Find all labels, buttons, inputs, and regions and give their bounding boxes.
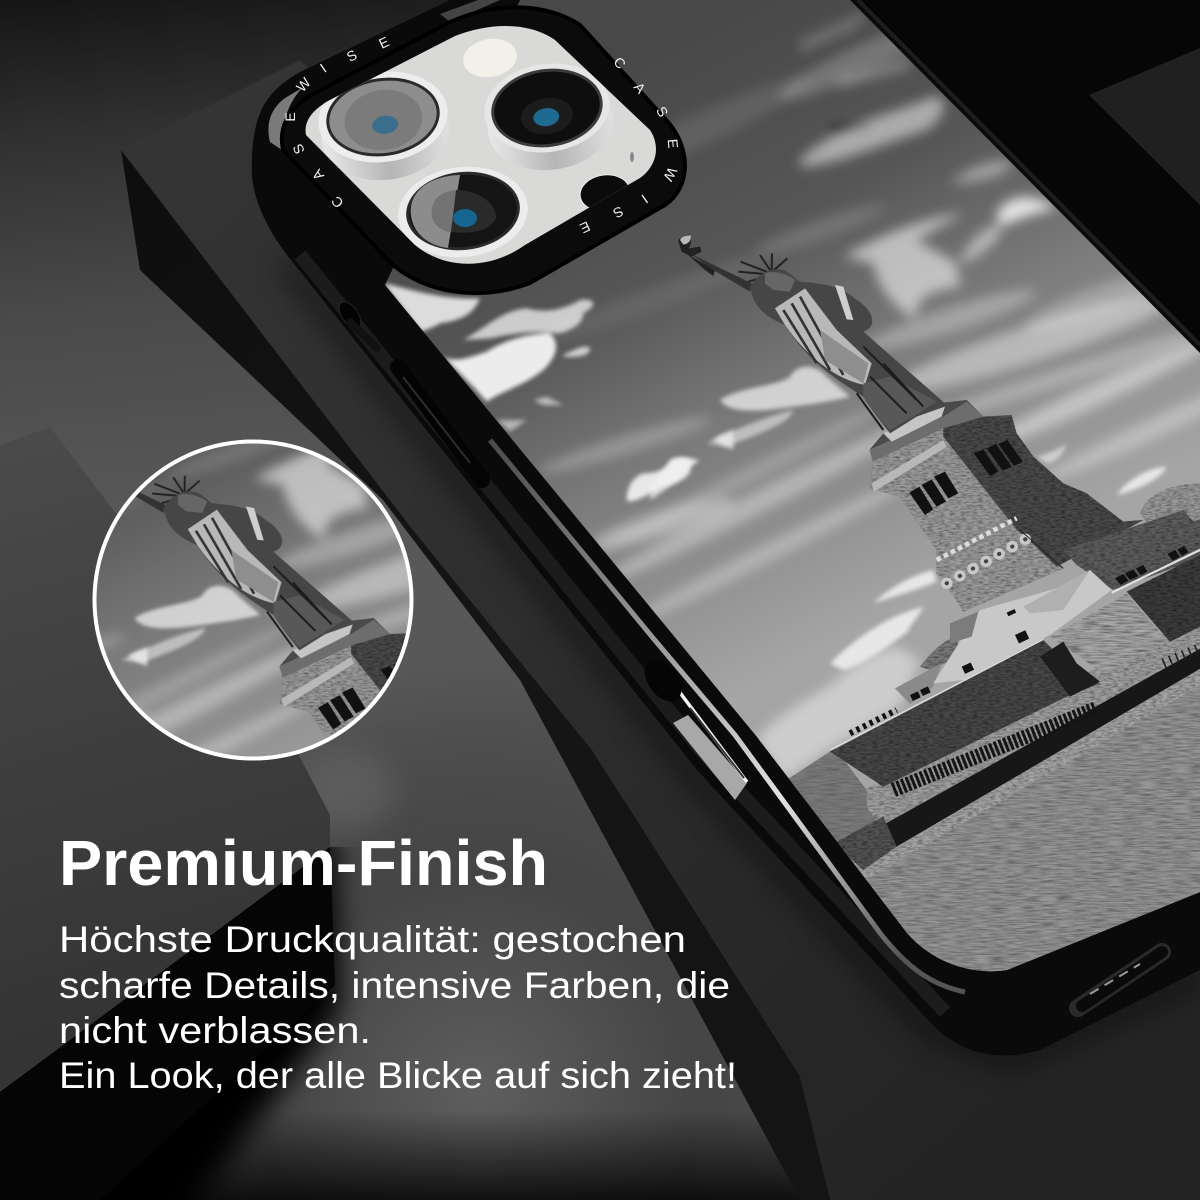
brand text left arc: E <box>376 33 392 52</box>
brand text right arc: S <box>610 203 626 222</box>
magnified detail circle <box>92 440 414 760</box>
lens 1 <box>318 72 449 180</box>
brand text left arc: A <box>308 166 327 183</box>
brand text left arc: I <box>317 60 329 76</box>
background: top right block face <box>1089 48 1200 205</box>
brand text right arc: E <box>665 138 681 149</box>
side long slot <box>398 367 482 480</box>
side hole upper <box>335 298 365 332</box>
brand text left arc: S <box>344 46 360 65</box>
top gloss strip <box>440 0 500 22</box>
brand text right arc: E <box>577 218 593 237</box>
brand text right arc: I <box>639 191 651 207</box>
background: lower stage glow <box>0 600 860 1200</box>
body text: Höchste Druckqualität: gestochen <box>59 919 686 960</box>
phone body <box>252 0 1200 1055</box>
right edge line <box>858 0 1200 345</box>
magnified image <box>96 444 410 756</box>
brand text left arc <box>282 33 392 211</box>
edge highlight <box>490 440 965 992</box>
brand text right arc <box>577 54 681 237</box>
flash <box>463 38 517 78</box>
brand text left arc: S <box>289 141 308 157</box>
marble strip at case corner <box>268 88 302 152</box>
lens window <box>306 26 656 264</box>
slot glint <box>403 377 470 463</box>
chrome side button <box>673 690 747 800</box>
body text: Ein Look, der alle Blicke auf sich zieht! <box>59 1055 737 1096</box>
camera island <box>268 0 685 293</box>
circle border <box>94 442 412 758</box>
phone side wall sheen <box>300 255 945 1012</box>
small pin <box>630 152 634 162</box>
background: light corner beside step <box>295 750 395 830</box>
phone case <box>252 0 1200 1060</box>
phone shadow <box>285 262 1200 1060</box>
background: main block side face <box>121 150 830 1200</box>
body text <box>59 919 737 1096</box>
body text: scharfe Details, intensive Farben, die <box>59 965 730 1006</box>
lens 2 <box>484 64 613 170</box>
bottom port <box>1078 952 1162 1008</box>
background: left step block <box>0 427 330 1092</box>
side hole <box>637 652 689 708</box>
background: bottom fade <box>0 1110 860 1200</box>
ring with brand text <box>282 7 685 293</box>
bottom port inner <box>1082 952 1162 1006</box>
brand text right arc: S <box>653 103 672 120</box>
printed image with statue <box>385 0 1200 972</box>
side slot upper <box>350 322 377 348</box>
brand text left arc: W <box>293 74 314 95</box>
lens 3 <box>398 166 528 258</box>
background: top right black space <box>820 0 1200 380</box>
microphone hole <box>580 174 629 208</box>
brand text left arc: E <box>282 112 298 122</box>
body text: nicht verblassen. <box>59 1010 371 1051</box>
brand text left arc: C <box>328 193 347 211</box>
heading: Premium-Finish <box>59 827 548 899</box>
brand text right arc: W <box>660 165 681 185</box>
brand text right arc: C <box>610 54 629 72</box>
port glints <box>1090 964 1140 994</box>
brand text right arc: A <box>631 79 649 97</box>
background: dark front block soft edge <box>0 820 340 1200</box>
background: dark front block <box>0 847 335 1200</box>
